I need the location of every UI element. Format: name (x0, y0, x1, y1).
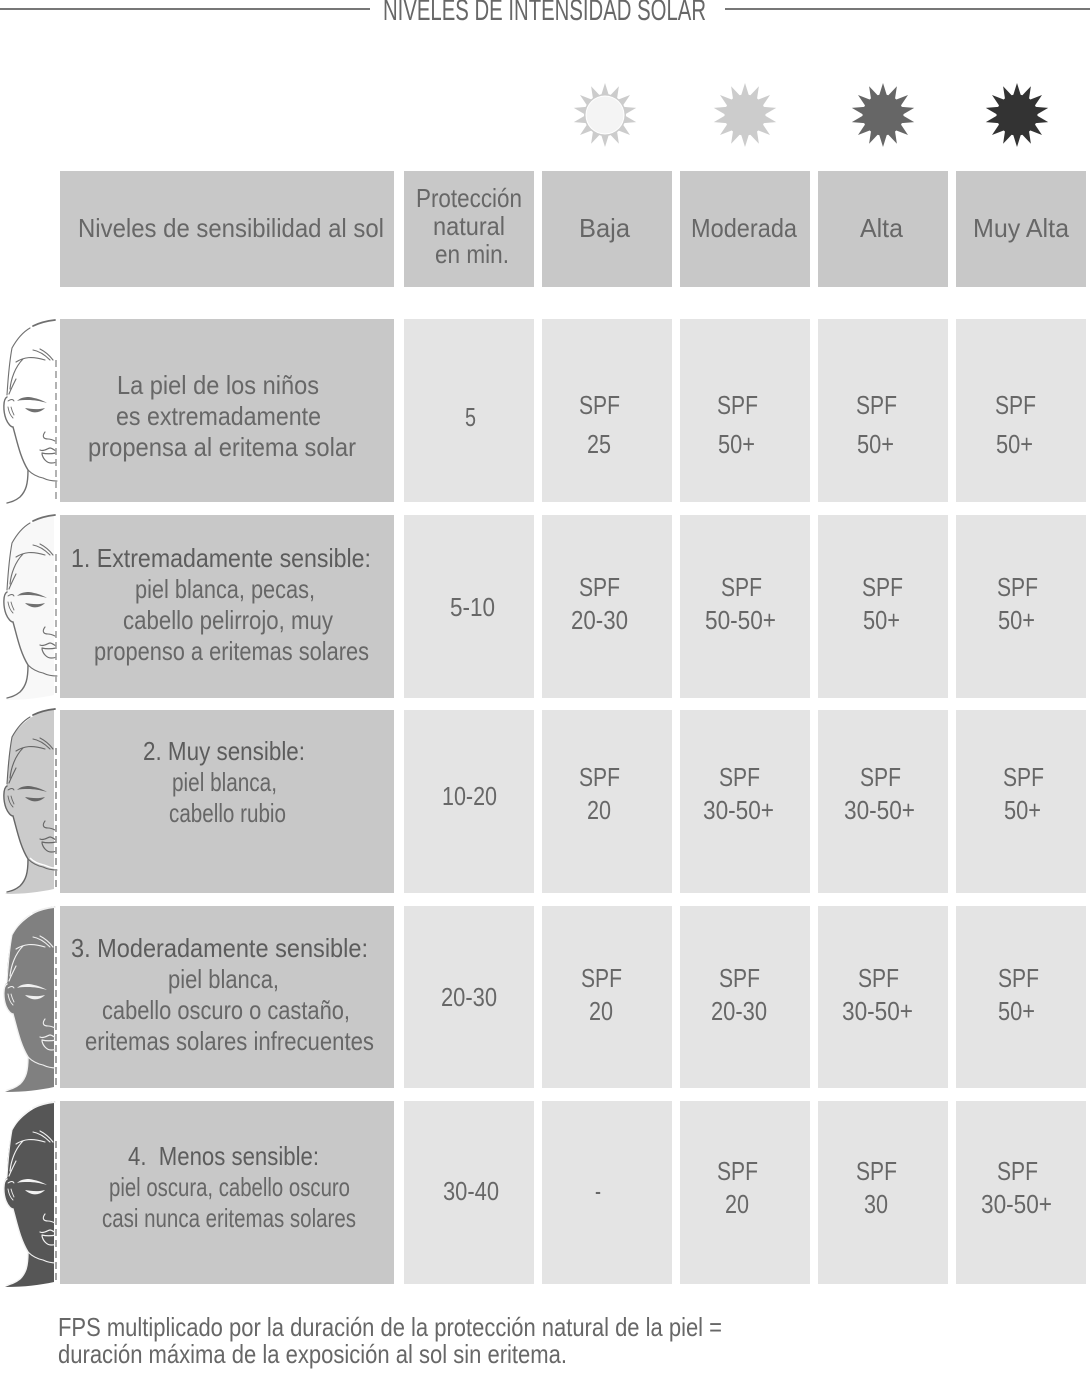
row: children: SPF (579, 390, 620, 420)
footnote (58, 1312, 722, 1369)
row: type 1: 1. Extremadamente sensible: (71, 543, 371, 573)
row: type 4: piel oscura, cabello oscuro (109, 1172, 350, 1202)
row: type 2: SPF (860, 762, 901, 792)
row: type 1: SPF (721, 572, 762, 602)
row: type 1: 20-30 (571, 605, 628, 635)
row: type 3: SPF (719, 963, 760, 993)
row: type 3: 20 (589, 996, 613, 1026)
row: type 2: 10-20 (442, 781, 497, 811)
row: type 2: 20 (587, 795, 611, 825)
row: type 2: SPF (719, 762, 760, 792)
footnote: duración máxima de la exposición al sol sin eritema. (58, 1339, 567, 1369)
row: type 4 (60, 1101, 1086, 1284)
row: type 1: cabello pelirrojo, muy (123, 605, 333, 635)
table header row: natural (433, 211, 505, 241)
row: type 2: 50+ (1004, 795, 1041, 825)
row: children: La piel de los niños (117, 370, 319, 400)
table header row: Muy Alta (973, 213, 1070, 243)
row: type 1: piel blanca, pecas, (135, 574, 315, 604)
table header row: Moderada (691, 213, 797, 243)
row: type 1: SPF (579, 572, 620, 602)
icon: face type 4 (4, 1101, 57, 1287)
row: type 3: SPF (998, 963, 1039, 993)
row: type 3: SPF (858, 963, 899, 993)
row: type 3 (60, 906, 1086, 1088)
row: type 2: piel blanca, (172, 767, 277, 797)
row: type 3: 30-50+ (842, 996, 913, 1026)
row: children: propensa al eritema solar (88, 432, 356, 462)
row: type 4: 30 (864, 1189, 888, 1219)
row: type 3: 20-30 (711, 996, 767, 1026)
row: type 4: SPF (856, 1156, 897, 1186)
row: type 4: 30-40 (443, 1176, 499, 1206)
row: type 4: - (595, 1176, 601, 1206)
row: type 1: 50+ (998, 605, 1035, 635)
row: type 2: cabello rubio (169, 798, 286, 828)
table header row: Protección (416, 183, 522, 213)
icon: face type 3 (4, 906, 57, 1092)
row: children: 50+ (857, 429, 894, 459)
icon: face type 1 (4, 514, 57, 700)
icon: sun high intensity (852, 83, 914, 147)
row: type 2: SPF (1003, 762, 1044, 792)
row: type 4: SPF (717, 1156, 758, 1186)
row: type 1: propenso a eritemas solares (94, 636, 369, 666)
row: type 4: 30-50+ (981, 1189, 1052, 1219)
table header row: Baja (579, 213, 631, 243)
row: type 4: casi nunca eritemas solares (102, 1203, 356, 1233)
icon: face children (4, 319, 57, 505)
row: type 4: 4. Menos sensible: (128, 1141, 319, 1171)
row: type 1: SPF (997, 572, 1038, 602)
row: children: 5 (465, 402, 476, 432)
icon: sun very high intensity (986, 83, 1048, 147)
icon: sun low intensity (574, 83, 636, 147)
row: type 1: 50-50+ (705, 605, 776, 635)
row: children (60, 319, 1086, 502)
row: type 2 (60, 710, 1086, 893)
row: type 3: 20-30 (441, 982, 497, 1012)
row: children: SPF (717, 390, 758, 420)
icon: sun moderate intensity (714, 83, 776, 147)
icon: face type 2 (4, 708, 57, 894)
row: type 3: piel blanca, (168, 964, 279, 994)
row: type 2: 30-50+ (844, 795, 915, 825)
row: type 4: 20 (725, 1189, 749, 1219)
footnote: FPS multiplicado por la duración de la protección natural de la piel = (58, 1312, 722, 1342)
row: type 2: SPF (579, 762, 620, 792)
row: type 3: eritemas solares infrecuentes (85, 1026, 374, 1056)
row: type 3: cabello oscuro o castaño, (102, 995, 350, 1025)
table header row: Alta (860, 213, 904, 243)
row: type 3: SPF (581, 963, 622, 993)
table header row: en min. (435, 239, 509, 269)
row: children: es extremadamente (116, 401, 321, 431)
row: type 3: 3. Moderadamente sensible: (71, 933, 368, 963)
table header row (60, 171, 1086, 287)
row: type 1: SPF (862, 572, 903, 602)
row: type 3: 50+ (998, 996, 1035, 1026)
row: type 1: 50+ (863, 605, 900, 635)
row: children: 50+ (996, 429, 1033, 459)
row: type 4: SPF (997, 1156, 1038, 1186)
row: type 2: 2. Muy sensible: (143, 736, 305, 766)
row: children: SPF (995, 390, 1036, 420)
row: type 1: 5-10 (450, 592, 495, 622)
table header row: Niveles de sensibilidad al sol (78, 213, 384, 243)
row: type 2: 30-50+ (703, 795, 774, 825)
row: children: 25 (587, 429, 611, 459)
row: children: 50+ (718, 429, 755, 459)
row: children: SPF (856, 390, 897, 420)
row: type 1 (60, 515, 1086, 698)
